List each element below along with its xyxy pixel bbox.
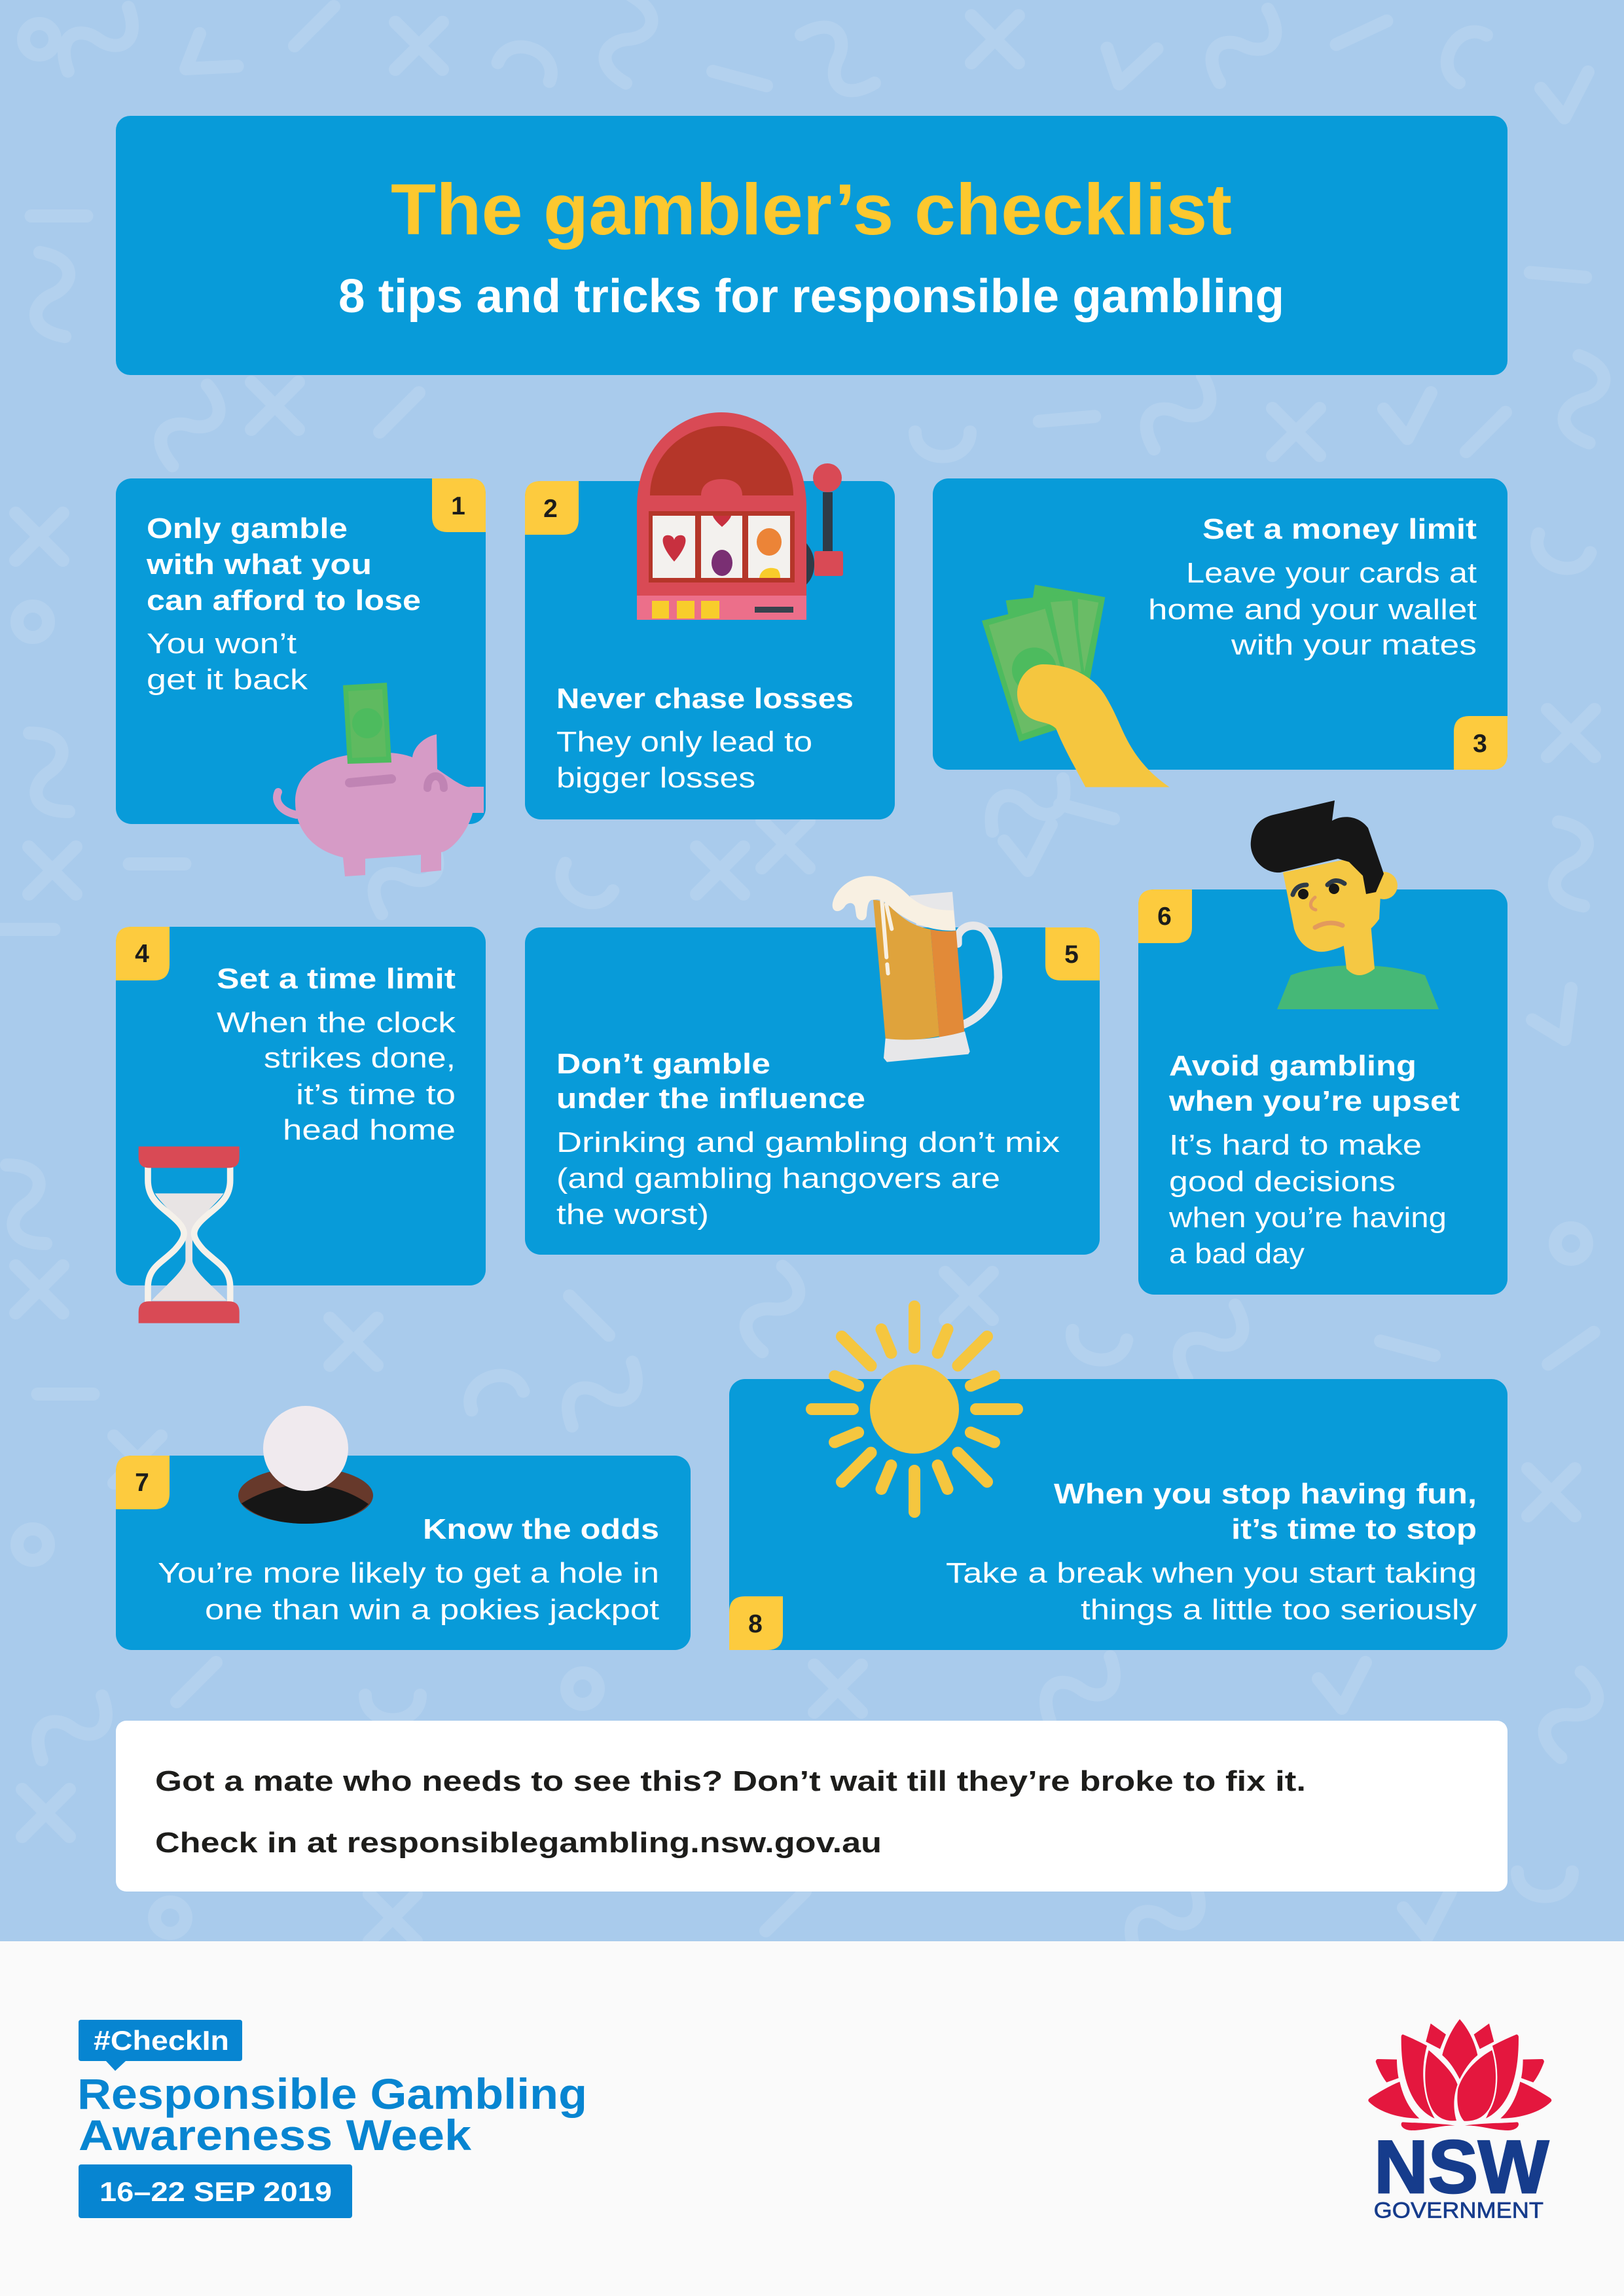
body 3: Leave your cards at [1186, 557, 1477, 589]
badge 7 [116, 1456, 170, 1509]
icon: golf ball and hole [238, 1406, 373, 1524]
body 2 [556, 726, 812, 794]
badge 4 [116, 927, 170, 980]
body 6: It’s hard to make [1169, 1129, 1422, 1161]
campaign logo: Responsible Gambling Awareness Week [77, 2020, 587, 2218]
badge 7: 7 [135, 1469, 149, 1497]
heading 1: with what you [146, 548, 372, 581]
header panel [116, 116, 1507, 375]
panel: tip 2 [525, 481, 895, 819]
panel: tip 6 [1138, 889, 1507, 1295]
body 4: strikes done, [264, 1042, 456, 1074]
body 1 [147, 628, 308, 696]
body 3: with your mates [1231, 629, 1477, 661]
icon: piggy bank with banknote [277, 683, 484, 876]
badge 4: 4 [135, 940, 149, 968]
icon: sun [812, 1306, 1017, 1512]
footer band [0, 1941, 1624, 2296]
badge 8: 8 [748, 1610, 763, 1638]
body 5: Drinking and gambling don’t mix [556, 1126, 1060, 1158]
body 5 [556, 1126, 1060, 1230]
icon: hourglass [139, 1147, 240, 1323]
title: The gambler’s checklist [391, 170, 1232, 250]
body 8: things a little too seriously [1081, 1594, 1477, 1626]
body 8: Take a break when you start taking [946, 1557, 1477, 1589]
body 6 [1168, 1129, 1447, 1270]
heading 2: Never chase losses [556, 683, 854, 715]
heading 7: Know the odds [423, 1513, 659, 1545]
body 1: get it back [147, 664, 308, 696]
logo: NSW Government [1368, 2019, 1551, 2223]
heading 6: when you’re upset [1168, 1085, 1460, 1117]
body 5: (and gambling hangovers are [556, 1162, 1000, 1194]
wordmark: NSW [1374, 2126, 1549, 2209]
callout: check in message: Check in at responsiblegambling.nsw.gov.au [155, 1827, 882, 1859]
heading 1: Only gamble [147, 512, 348, 545]
body 6: when you’re having [1168, 1202, 1447, 1234]
panel: tip 4 [116, 927, 486, 1285]
body 7: one than win a pokies jackpot [205, 1594, 659, 1626]
heading 6 [1168, 1050, 1460, 1117]
badge 5 [1045, 927, 1100, 980]
heading 8: it’s time to stop [1231, 1513, 1477, 1545]
panel: tip 8 [729, 1379, 1507, 1650]
heading 1 [146, 512, 421, 617]
badge 1: 1 [451, 492, 465, 520]
body 5: the worst) [556, 1198, 709, 1230]
subtitle: 8 tips and tricks for responsible gambling [338, 270, 1284, 323]
body 1: You won’t [147, 628, 297, 660]
heading 6: Avoid gambling [1169, 1050, 1416, 1082]
heading 5: under the influence [556, 1083, 865, 1115]
heading 3: Set a money limit [1202, 513, 1477, 545]
body 8 [946, 1557, 1477, 1626]
icon: hand holding cash [982, 584, 1170, 787]
campaign name: Responsible Gambling [77, 2070, 587, 2118]
heading 1: can afford to lose [147, 584, 421, 617]
body 7: You’re more likely to get a hole in [158, 1557, 659, 1589]
badge 3: 3 [1473, 730, 1487, 758]
heading 5: Don’t gamble [556, 1048, 770, 1080]
waratah flower [1368, 2019, 1551, 2130]
body 7 [158, 1557, 659, 1626]
callout: check in message [116, 1721, 1507, 1892]
date tag: 16–22 SEP 2019 [99, 2176, 332, 2207]
body 4: head home [283, 1114, 456, 1146]
body 4: When the clock [217, 1007, 456, 1039]
heading 8 [1054, 1478, 1477, 1545]
panel: tip 5 [525, 927, 1100, 1255]
badge 3 [1454, 716, 1507, 770]
panel: tip 3 [933, 478, 1507, 770]
wordmark: GOVERNMENT [1374, 2198, 1543, 2223]
badge 6: 6 [1157, 903, 1172, 931]
body 4: it’s time to [296, 1079, 456, 1111]
heading 8: When you stop having fun, [1054, 1478, 1477, 1510]
heading 4: Set a time limit [217, 963, 456, 995]
panel: tip 1 [116, 478, 486, 824]
icon: beer mug [833, 876, 998, 1062]
body 3: home and your wallet [1148, 594, 1477, 626]
hashtag speech bubble: #CheckIn [94, 2025, 229, 2056]
badge 8 [729, 1596, 783, 1650]
callout: check in message: Got a mate who needs to see this? Don’t wait till they’re broke to fix it. [155, 1765, 1306, 1797]
body 6: a bad day [1169, 1238, 1305, 1270]
icon: slot machine [637, 412, 843, 620]
icon: upset man [1251, 800, 1439, 1009]
hashtag speech bubble [79, 2020, 242, 2071]
panel: tip 7 [116, 1456, 691, 1650]
badge 2 [525, 481, 579, 535]
body 2: bigger losses [556, 762, 755, 794]
campaign name [77, 2070, 587, 2159]
body 2: They only lead to [556, 726, 812, 758]
badge 2: 2 [543, 495, 558, 523]
badge 1 [432, 478, 486, 532]
body 4 [217, 1007, 456, 1146]
body 6: good decisions [1169, 1166, 1396, 1198]
date tag [79, 2164, 352, 2218]
campaign name: Awareness Week [79, 2111, 471, 2159]
heading 5 [556, 1048, 865, 1115]
badge 6 [1138, 889, 1192, 943]
badge 5: 5 [1064, 941, 1079, 969]
body 3 [1148, 557, 1477, 661]
